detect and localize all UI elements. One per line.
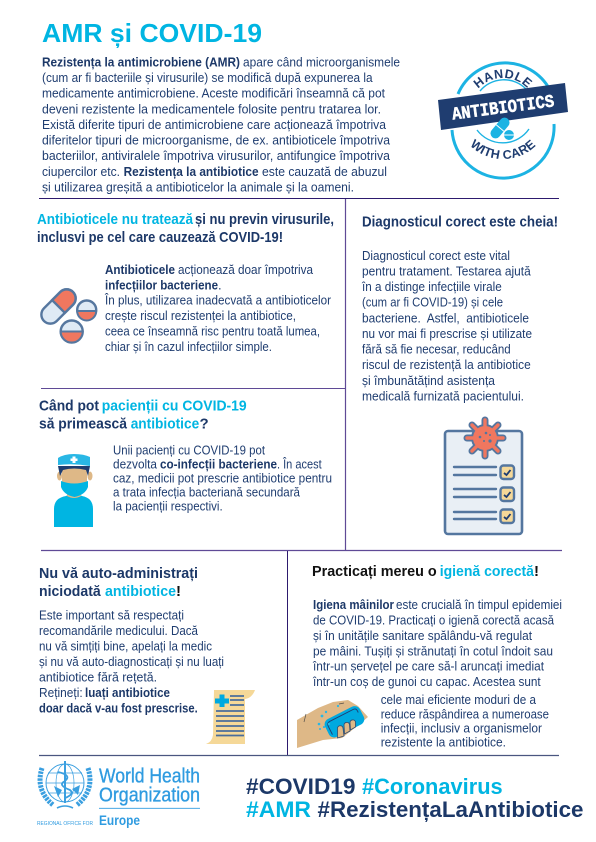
text block: Unii pacienți cu COVID-19 pot [113,443,265,458]
heading: să primească [39,416,128,433]
text block: medicală furnizată pacientului. [362,389,524,404]
icon: hand with soap [297,700,368,748]
badge: handle antibiotics with care: WITH CARE [471,138,536,159]
logo: WHO Regional Office for Europe [37,761,200,828]
text block: nu vă simțiți bine, apelați la medic [39,639,212,654]
text block: co-infecții bacteriene [160,457,277,472]
panel: when COVID-19 patients can receive antibiotics [39,398,332,527]
heading: Antibioticele nu tratează [37,211,194,228]
logo: WHO Regional Office for Europe: Organization [99,785,200,807]
heading: antibiotice [131,416,199,433]
text block: acționează doar împotriva [178,262,314,277]
text block: recomandările medicului. Dacă [39,623,199,638]
text block: antibiotice fără rețetă. [39,669,157,684]
intro text block: este cauzată de abuzul [262,164,387,179]
text block: Rețineți: [39,685,83,700]
text block: de COVID-19. Practicați o igienă corectă acasă [313,613,555,628]
text block: bacteriene. Astfel, antibioticele [362,310,529,325]
text block: Este important să respectați [39,607,184,622]
text block: la pacienții respectivi. [113,499,223,514]
text block: Igiena mâinilor [313,597,394,612]
text block [361,248,532,404]
text block: doar dacă v-au fost prescrise. [39,701,198,716]
text block: infecții, inclusiv a organismelor [381,720,543,735]
text block: ceea ce înseamnă risc pentru toată lumea, [105,324,320,338]
heading [39,398,247,433]
text block: . În acest [277,457,322,472]
intro text block: Există diferite tipuri de antimicrobiene care acționează împotriva [42,117,387,132]
intro text block: și utilizarea greșită a antibioticelor la animale și la oameni. [42,179,354,194]
intro text block: diferitelor tipuri de microorganisme, de ex. antibioticele împotriva [42,133,391,148]
heading: ? [200,416,209,433]
panel: always practice correct hygiene [297,563,562,750]
text block: și îmbunătățind asistența [362,373,496,388]
heading [312,563,539,580]
intro text block: Rezistența la antimicrobiene (AMR) [42,54,240,70]
heading: niciodată [39,583,101,600]
icon: clipboard with virus [445,420,522,534]
intro text block: (cum ar fi bacteriile și virusurile) se modifică după expunerea la [42,70,373,85]
panel: antibiotics do not treat viruses [37,211,334,354]
text block: și nu vă auto-diagnosticați și nu luați [39,654,224,669]
intro text block: ciupercilor etc. [42,164,120,179]
heading: antibiotice [105,583,176,600]
hashtags: #AMR [246,797,311,822]
panel: correct diagnosis [361,214,558,534]
heading: Practicați mereu o [312,563,437,580]
icon: doctor with mask [54,454,93,527]
text block: infecțiilor bacteriene [105,277,218,292]
icon: pills [38,286,96,342]
text block: Diagnosticul corect este vital [362,248,510,263]
text block: pentru tratament. Testarea ajută [362,264,531,279]
title: AMR și COVID-19 [42,18,262,48]
heading [37,211,334,246]
icon: WHO emblem [40,761,90,808]
heading: Diagnosticul corect este cheia! [362,214,558,231]
heading: și nu previn virusurile, [195,211,334,228]
intro text block [42,54,400,194]
heading: pacienții cu COVID-19 [102,398,247,415]
heading: Nu vă auto-administrați [39,565,198,582]
badge: handle antibiotics with care: HANDLE [473,69,532,88]
text block: În plus, utilizarea inadecvată a antibioticelor [104,293,332,308]
text block: nu vor mai fi prescrise și utilizate [362,326,532,341]
text block: a trata infecția bacteriană secundară [113,485,301,500]
text block: caz, medicii pot prescrie antibiotice pentru [113,471,332,486]
text block: chiar și în cazul infecțiilor simple. [105,339,272,354]
text block [312,597,562,750]
text block: reduce răspândirea a numeroase [381,706,549,721]
heading: ! [176,583,181,600]
text block: cele mai eficiente moduri de a [381,692,537,707]
text block: (cum ar fi COVID-19) și cele [362,295,503,310]
intro text block: bacteriilor, antiviralele împotriva virusurilor, antifungice împotriva [42,148,391,163]
text block: dezvolta [113,457,158,472]
text block: fără să fie necesar, reducând [362,342,511,357]
icon: prescription scroll [206,690,255,744]
heading: Când pot [39,398,99,415]
hashtags: #Coronavirus [362,774,503,799]
heading: igienă corectă [440,563,535,580]
heading: inclusvi pe cel care cauzează COVID-19! [37,229,283,246]
hashtags [246,774,584,822]
text block: crește riscul rezistenței la antibiotice, [105,308,296,323]
heading [39,565,198,600]
intro text block: medicamente antimicrobiene. Aceste modificări înseamnă că pot [42,86,385,101]
text block [113,443,332,514]
logo: WHO Regional Office for Europe: Europe [99,812,140,828]
panel: never self-administer antibiotics [39,565,255,744]
heading: ! [534,563,539,580]
badge: handle antibiotics with care [438,61,568,180]
text block: riscul de rezistență la antibiotice [362,357,531,372]
text block [104,262,332,354]
text block: și în unitățile sanitare spălându-vă regulat [313,628,532,643]
text block: într-un coș de gunoi cu capac. Acestea sunt [312,674,541,689]
text block: . [218,277,222,292]
hashtags: #RezistențaLaAntibiotice [318,797,584,822]
logo: WHO Regional Office for Europe: World Health [99,766,200,788]
text block [39,607,224,716]
text block: în a distinge infecțiile virale [361,279,502,294]
text block: rezistente la antibiotice. [381,735,506,750]
intro text block: deveni rezistente la medicamentele folosite pentru tratarea lor. [42,101,381,116]
text block: pe mâini. Tușiți și strănutați în cotul îndoit sau [313,643,553,658]
text block: într-un șervețel pe care să-l aruncați imediat [312,659,544,674]
hashtags: #COVID19 [246,774,356,799]
text block: Antibioticele [105,262,175,277]
intro text block: apare când microorganismele [243,54,400,70]
text block: luați antibiotice [85,685,170,700]
logo: WHO Regional Office for Europe: REGIONAL OFFICE FOR [37,821,93,827]
text block: este crucială în timpul epidemiei [396,597,562,612]
badge: handle antibiotics with care: ANTIBIOTICS [451,92,556,126]
intro text block: Rezistența la antibiotice [124,164,259,179]
